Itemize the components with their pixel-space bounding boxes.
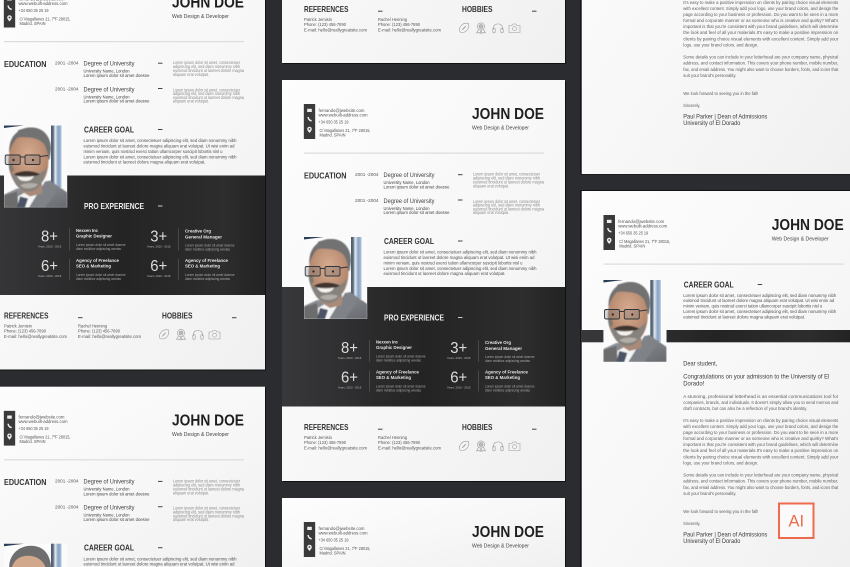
photo: portrait <box>4 126 67 208</box>
career goal section <box>84 124 237 165</box>
photo: portrait <box>304 237 367 319</box>
name heading <box>172 413 244 438</box>
experience band: Years, 2010 - 2015 <box>338 356 362 360</box>
education section: University Name, London <box>84 487 130 492</box>
signature <box>683 114 767 127</box>
references section: Patrick Jemisin <box>304 435 332 441</box>
education section: euismod tincidunt ut laoreet dolore magna <box>173 513 245 518</box>
letter body: Sincerely, <box>683 103 700 108</box>
education section: 2001 -2004 <box>355 198 379 204</box>
signature: University of El Dorado <box>683 121 741 127</box>
contact block: +34 650 35 25 19 <box>318 537 349 542</box>
contact block: +34 650 35 25 19 <box>318 119 349 124</box>
panel: resume sheet bottom center <box>282 498 566 567</box>
education section: adipiscing elit, sed diam nonummy nibh <box>173 91 241 96</box>
education section: Lorem ipsum dolor sit amet doesne <box>84 99 150 104</box>
career goal section: CAREER GOAL <box>684 279 734 289</box>
experience band: 6+ <box>41 258 58 275</box>
experience band: 3+ <box>450 340 467 357</box>
references section: Patrick Jemisin <box>4 323 32 329</box>
experience band: 6+ <box>150 258 167 275</box>
experience band: Graphic Designer <box>376 345 412 351</box>
education section: Degree of University <box>384 172 435 179</box>
education section: aliquam erat volutpat. <box>473 210 509 215</box>
experience band: Agency of Freelance <box>485 370 528 376</box>
contact block: C/ Magallanes 21, 7ºF 28015, <box>20 435 70 440</box>
career goal section: minim veniam, quis nostrud exerci tation ullamcorper suscipit lobortis nisl u <box>84 149 223 154</box>
signature <box>683 532 767 545</box>
contact block: +34 650 35 25 19 <box>18 8 49 13</box>
letter body: It's easy to make a positive impression on clients by pairing choice visual elements <box>683 0 839 5</box>
experience band: Nexxen Inc <box>376 340 398 346</box>
panel: resume sheet bottom left <box>0 387 266 567</box>
education section: Lorem ipsum dolor sit amet doesne <box>384 210 450 215</box>
letter body: fax, and email address. You might also want to choose borders, fonts, and icons that <box>683 67 839 72</box>
experience band: Lorem ipsum dolor sit amet dosene <box>76 243 126 247</box>
references section <box>304 4 441 33</box>
references section: REFERENCES <box>304 4 349 14</box>
letter body: suit your brand's personality. <box>683 73 736 78</box>
education section: Lorem ipsum dolor sit amet, consectetuer <box>473 172 541 177</box>
experience band <box>282 287 565 406</box>
education section: euismod tincidunt ut laoreet dolore magna <box>173 486 245 491</box>
letter body: address, and contact information. This covers your phone number, mobile number, <box>683 479 838 484</box>
panel: resume sheet top left <box>0 0 266 370</box>
education section: euismod tincidunt ut laoreet dolore magna <box>473 207 545 212</box>
education section: Degree of University <box>384 198 435 205</box>
references section: Rachel Henning <box>78 323 107 329</box>
experience band: diam molidice adipiscing woelas <box>485 359 530 363</box>
contact block: Madrid. SPAIN <box>20 21 46 26</box>
education section: University Name, London <box>84 94 130 99</box>
name heading <box>472 524 544 549</box>
career goal section: CAREER GOAL <box>84 543 134 553</box>
education section: aliquam erat volutpat. <box>173 72 209 77</box>
letter body: Sincerely, <box>683 521 700 526</box>
experience band: Nexxen Inc <box>76 228 98 234</box>
references section: REFERENCES <box>4 311 49 321</box>
references section: Rachel Henning <box>378 435 407 441</box>
experience band: Creative Org <box>185 229 211 235</box>
contact block: fernando@jwebsite.com <box>18 415 65 420</box>
letter body: We look forward to seeing you in the fall! <box>683 509 758 514</box>
letter body: the look and feel of all your materials.It's easy to make a positive impression on <box>683 448 839 453</box>
career goal section: euismod tincidunt ut laoreet dolore magna aliquam erat volutpat. <box>384 271 506 276</box>
education section: euismod tincidunt ut laoreet dolore magna <box>473 180 545 185</box>
experience band: Years, 2010 - 2015 <box>147 245 171 249</box>
letter body: with excellent content. Simply add your logo, use your brand colors, and design the <box>683 424 839 429</box>
contact block: www.webuilt-address.com <box>618 223 668 228</box>
letter body: logo, use your brand colors, and design. <box>683 43 758 48</box>
experience band: SEO & Marketing <box>76 264 111 270</box>
experience band: Years, 2010 - 2015 <box>447 386 471 390</box>
contact block: fernando@jwebsite.com <box>318 108 365 113</box>
education section <box>304 170 545 215</box>
education section <box>4 477 245 522</box>
experience band: Lorem ipsum dolor sit amet dosene <box>485 384 535 388</box>
experience band: diam molidice adipiscing woelas <box>185 277 230 281</box>
references section: Patrick Jemisin <box>304 17 332 23</box>
experience band: SEO & Marketing <box>376 375 411 381</box>
experience band: 8+ <box>341 340 358 357</box>
career goal section <box>84 543 237 567</box>
hobbies section <box>160 311 236 340</box>
letter body: logo, use your brand colors, and design. <box>683 461 758 466</box>
experience band: diam molidice adipiscing woelas <box>185 248 230 252</box>
education section: 2001 -2004 <box>55 479 79 485</box>
name heading: Web Design & Developer <box>772 236 829 242</box>
letter body: important is that you're consistent with your brand guidelines, which will determine <box>683 24 839 29</box>
name heading: Web Design & Developer <box>172 14 229 20</box>
contact block: C/ Magallanes 21, 7ºF 28015, <box>619 239 670 244</box>
contact block: www.webuilt-address.com <box>318 530 368 535</box>
contact block: fernando@jwebsite.com <box>618 219 665 224</box>
contact block <box>304 522 370 557</box>
career goal section: Lorem ipsum dolor sit amet, consectetuer adipiscing elit, sed diam nonummy nibh <box>384 266 537 271</box>
references section: E-mail: hello@reallygreatsite.com <box>78 334 141 340</box>
letter body: Some details you can include in your letterhead are your company name, physical <box>683 473 838 478</box>
education section: Lorem ipsum dolor sit amet doesne <box>84 517 150 522</box>
experience band: Lorem ipsum dolor sit amet dosene <box>76 273 126 277</box>
name heading: JOHN DOE <box>472 106 544 123</box>
education section: aliquam erat volutpat. <box>173 490 209 495</box>
letter body: Some details you can include in your letterhead are your company name, physical <box>683 55 838 60</box>
education section: Degree of University <box>84 505 135 512</box>
letter body: Dear student, <box>683 361 718 367</box>
name heading: JOHN DOE <box>172 413 244 430</box>
education section: 2001 -2004 <box>55 60 79 66</box>
education section: Lorem ipsum dolor sit amet, consectetuer <box>173 87 241 92</box>
photo: portrait cropped by page edge <box>4 544 67 567</box>
letter body: address, and contact information. This covers your phone number, mobile number, <box>683 61 838 66</box>
photo: portrait <box>603 280 667 362</box>
career goal section <box>683 279 837 320</box>
letter body: It's easy to make a positive impression on clients by pairing choice visual elements <box>683 418 839 423</box>
experience band: Lorem ipsum dolor sit amet dosene <box>185 244 235 248</box>
career goal section: Lorem ipsum dolor sit amet, consectetuer adipiscing elit, sed diam nonummy nibh <box>683 309 837 314</box>
letter body: We look forward to seeing you in the fall! <box>683 91 758 96</box>
experience band: 8+ <box>41 228 58 245</box>
letter body: Dorado! <box>683 381 705 387</box>
experience band: Graphic Designer <box>76 234 112 240</box>
education section: Lorem ipsum dolor sit amet doesne <box>84 491 150 496</box>
references section: E-mail: hello@reallygreatsite.com <box>378 445 441 451</box>
experience band: diam molidice adipiscing woelas <box>76 247 121 251</box>
education section: University Name, London <box>84 68 130 73</box>
experience band: Creative Org <box>485 340 511 346</box>
contact block: C/ Magallanes 21, 7ºF 28015, <box>320 546 370 551</box>
education section: EDUCATION <box>4 59 46 69</box>
career goal section: minim veniam, quis nostrud exerci tation ullamcorper suscipit lobortis nisl u <box>683 304 823 309</box>
education section: Degree of University <box>84 86 135 93</box>
hobbies section: HOBBIES <box>462 4 493 14</box>
name heading <box>472 106 544 131</box>
contact block: www.webuilt-address.com <box>318 112 368 117</box>
experience band: Lorem ipsum dolor sit amet dosene <box>376 354 426 358</box>
references section: E-mail: hello@reallygreatsite.com <box>304 445 367 451</box>
experience band: PRO EXPERIENCE <box>84 201 144 211</box>
letter body: formal and corporate manner or as someone who is creative and quirky? What's <box>683 436 839 441</box>
education section: Lorem ipsum dolor sit amet doesne <box>84 73 150 78</box>
experience band: diam molidice adipiscing woelas <box>485 389 530 393</box>
panel: resume sheet top center <box>282 0 566 64</box>
education section: adipiscing elit, sed diam nonummy nibh <box>173 64 241 69</box>
references section: E-mail: hello@reallygreatsite.com <box>304 27 367 33</box>
education section: adipiscing elit, sed diam nonummy nibh <box>473 176 541 181</box>
references section: Phone: (123) 456-7890 <box>78 328 120 334</box>
career goal section: Lorem ipsum dolor sit amet, consectetuer adipiscing elit, sed diam nonummy nibh <box>84 556 237 561</box>
letter body: the look and feel of all your materials.It's easy to make a positive impression on <box>683 30 839 35</box>
contact block: C/ Magallanes 21, 7ºF 28015, <box>320 128 370 133</box>
experience band: General Manager <box>185 234 222 240</box>
education section: University Name, London <box>84 513 130 518</box>
panel: letter sheet right <box>580 190 850 567</box>
name heading: Web Design & Developer <box>472 125 529 131</box>
education section: adipiscing elit, sed diam nonummy nibh <box>173 509 241 514</box>
references section: REFERENCES <box>304 422 349 432</box>
signature: University of El Dorado <box>683 539 741 545</box>
education section: adipiscing elit, sed diam nonummy nibh <box>473 203 541 208</box>
education section: University Name, London <box>384 206 430 211</box>
name heading <box>172 0 244 20</box>
hobbies section <box>460 422 536 452</box>
contact block: +34 650 35 25 19 <box>618 230 649 235</box>
contact block: Madrid. SPAIN <box>619 243 645 248</box>
references section <box>4 311 141 340</box>
education section: 2001 -2004 <box>55 505 79 511</box>
letter body <box>683 0 839 108</box>
experience band: Years, 2010 - 2015 <box>338 386 362 390</box>
experience band: Agency of Freelance <box>376 370 419 376</box>
education section: aliquam erat volutpat. <box>173 99 209 104</box>
education section: adipiscing elit, sed diam nonummy nibh <box>173 482 241 487</box>
references section: Rachel Henning <box>378 17 407 23</box>
career goal section: minim veniam, quis nostrud exerci tation ullamcorper suscipit lobortis nisl u <box>384 261 523 266</box>
career goal section: euismod tincidunt ut laoreet dolore magna aliquam erat volutpat. Ut wisi enim ad <box>683 298 835 303</box>
contact block: www.webuilt-address.com <box>18 419 68 424</box>
education section: aliquam erat volutpat. <box>473 184 509 189</box>
references section <box>304 422 441 451</box>
references section: Phone: (123) 456-7890 <box>378 440 420 446</box>
experience band: SEO & Marketing <box>185 264 220 270</box>
experience band: Years, 2010 - 2015 <box>38 274 62 278</box>
signature: Paul Parker | Dean of Admissions <box>683 114 767 120</box>
career goal section: euismod tincidunt ut laoreet dolore magna aliquam erat volutpat. <box>683 315 805 320</box>
experience band: Agency of Freelance <box>185 258 228 264</box>
icon: AI badge <box>779 504 814 538</box>
contact block: fernando@jwebsite.com <box>318 526 365 531</box>
references section: E-mail: hello@reallygreatsite.com <box>378 27 441 33</box>
education section: Degree of University <box>84 60 135 67</box>
education section: Degree of University <box>84 479 135 486</box>
experience band: diam molidice adipiscing woelas <box>376 389 421 393</box>
career goal section: Lorem ipsum dolor sit amet, consectetuer adipiscing elit, sed diam nonummy nibh <box>84 154 237 159</box>
experience band <box>0 176 265 295</box>
education section <box>4 59 245 104</box>
name heading: Web Design & Developer <box>172 432 229 438</box>
letter body: page according to your business or profession. Do you want to be seen in a more <box>683 430 839 435</box>
name heading: JOHN DOE <box>472 524 544 541</box>
career goal section: euismod tincidunt ut laoreet dolore magna aliquam erat volutpat. Ut wisi enim ad <box>84 562 235 567</box>
contact block: www.webuilt-address.com <box>18 1 68 6</box>
letter body: clients by pairing choice visual elements with excellent content. Simply add your <box>683 455 839 460</box>
education section: Lorem ipsum dolor sit amet, consectetuer <box>473 199 541 204</box>
panel: resume sheet center <box>282 80 566 482</box>
education section: EDUCATION <box>4 477 46 487</box>
contact block <box>4 0 71 28</box>
experience band: 6+ <box>341 370 358 387</box>
career goal section: Lorem ipsum dolor sit amet, consectetuer adipiscing elit, sed diam nonummy nibh <box>384 250 537 255</box>
letter body: Congratulations on your admission to the University of El <box>683 375 829 381</box>
experience band: SEO & Marketing <box>485 375 520 381</box>
letter body: fax, and email address. You might also want to choose borders, fonts, and icons that <box>683 485 839 490</box>
hobbies section <box>460 4 536 34</box>
experience band: Agency of Freelance <box>76 258 119 264</box>
letter body: important is that you're consistent with your brand guidelines, which will determine <box>683 442 839 447</box>
letter body: companies, brands, and individuals. It doesn't simply allow you to send memos and <box>683 400 839 405</box>
letter body <box>683 361 839 526</box>
hobbies section: HOBBIES <box>162 311 193 321</box>
references section: Phone: (123) 456-7890 <box>4 328 46 334</box>
career goal section: Lorem ipsum dolor sit amet, consectetuer adipiscing elit, sed diam nonummy nibh <box>84 138 237 143</box>
education section: 2001 -2004 <box>355 172 379 178</box>
career goal section: euismod tincidunt ut laoreet dolore magna aliquam erat volutpat. <box>84 160 206 165</box>
letter body: page according to your business or profession. Do you want to be seen in a more <box>683 12 839 17</box>
contact block: C/ Magallanes 21, 7ºF 28015, <box>20 16 70 21</box>
references section: E-mail: hello@reallygreatsite.com <box>4 334 67 340</box>
contact block: +34 650 35 25 19 <box>18 426 49 431</box>
experience band: Lorem ipsum dolor sit amet dosene <box>485 355 535 359</box>
experience band: Years, 2010 - 2015 <box>447 356 471 360</box>
letter body: with excellent content. Simply add your logo, use your brand colors, and design the <box>683 6 839 11</box>
career goal section: euismod tincidunt ut laoreet dolore magna aliquam erat volutpat. Ut wisi enim ad <box>384 255 535 260</box>
education section: Lorem ipsum dolor sit amet, consectetuer <box>173 60 241 65</box>
references section: Phone: (123) 456-7890 <box>304 440 346 446</box>
career goal section: CAREER GOAL <box>84 124 134 134</box>
experience band: 6+ <box>450 370 467 387</box>
hobbies section: HOBBIES <box>462 422 493 432</box>
career goal section: CAREER GOAL <box>384 236 434 246</box>
career goal section: Lorem ipsum dolor sit amet, consectetuer adipiscing elit, sed diam nonummy nibh <box>683 293 837 298</box>
experience band: Lorem ipsum dolor sit amet dosene <box>185 273 235 277</box>
education section: EDUCATION <box>304 170 346 180</box>
signature: Paul Parker | Dean of Admissions <box>683 532 767 538</box>
contact block <box>304 104 370 139</box>
contact block <box>603 215 670 250</box>
experience band: General Manager <box>485 346 522 352</box>
education section: University Name, London <box>384 180 430 185</box>
letter body: draft contracts, but can also be a reflection of your brand's identity. <box>683 406 807 411</box>
education section: aliquam erat volutpat. <box>173 517 209 522</box>
education section: 2001 -2004 <box>55 86 79 92</box>
letter body: clients by pairing choice visual elements with excellent content. Simply add your <box>683 37 839 42</box>
contact block: Madrid. SPAIN <box>320 132 346 137</box>
experience band: Years, 2010 - 2015 <box>38 245 62 249</box>
contact block: Madrid. SPAIN <box>20 439 46 444</box>
career goal section <box>384 236 537 276</box>
education section: Lorem ipsum dolor sit amet, consectetuer <box>173 506 241 511</box>
education section: euismod tincidunt ut laoreet dolore magna <box>173 95 245 100</box>
letter body: suit your brand's personality. <box>683 491 736 496</box>
education section: Lorem ipsum dolor sit amet doesne <box>384 185 450 190</box>
dark stripe <box>582 330 850 342</box>
letter body: A stunning, professional letterhead is an essential communications tool for <box>683 394 839 399</box>
experience band: diam molidice adipiscing woelas <box>376 359 421 363</box>
name heading <box>772 217 844 242</box>
references section: Phone: (123) 456-7890 <box>378 22 420 28</box>
references section: Phone: (123) 456-7890 <box>304 22 346 28</box>
career goal section: euismod tincidunt ut laoreet dolore magna aliquam erat volutpat. Ut wisi enim ad <box>84 143 235 148</box>
letter body: formal and corporate manner or as someone who is creative and quirky? What's <box>683 18 839 23</box>
experience band: 3+ <box>150 228 167 245</box>
contact block: Madrid. SPAIN <box>320 550 346 555</box>
experience band: diam molidice adipiscing woelas <box>76 277 121 281</box>
experience band: PRO EXPERIENCE <box>384 312 444 322</box>
education section: Lorem ipsum dolor sit amet, consectetuer <box>173 478 241 483</box>
contact block <box>4 411 71 446</box>
education section: euismod tincidunt ut laoreet dolore magna <box>173 68 245 73</box>
panel: letter sheet top right <box>580 0 850 174</box>
experience band: Lorem ipsum dolor sit amet dosene <box>376 384 426 388</box>
experience band: Years, 2010 - 2015 <box>147 274 171 278</box>
name heading: Web Design & Developer <box>472 543 529 549</box>
icon: AI badge: AI <box>789 512 804 530</box>
